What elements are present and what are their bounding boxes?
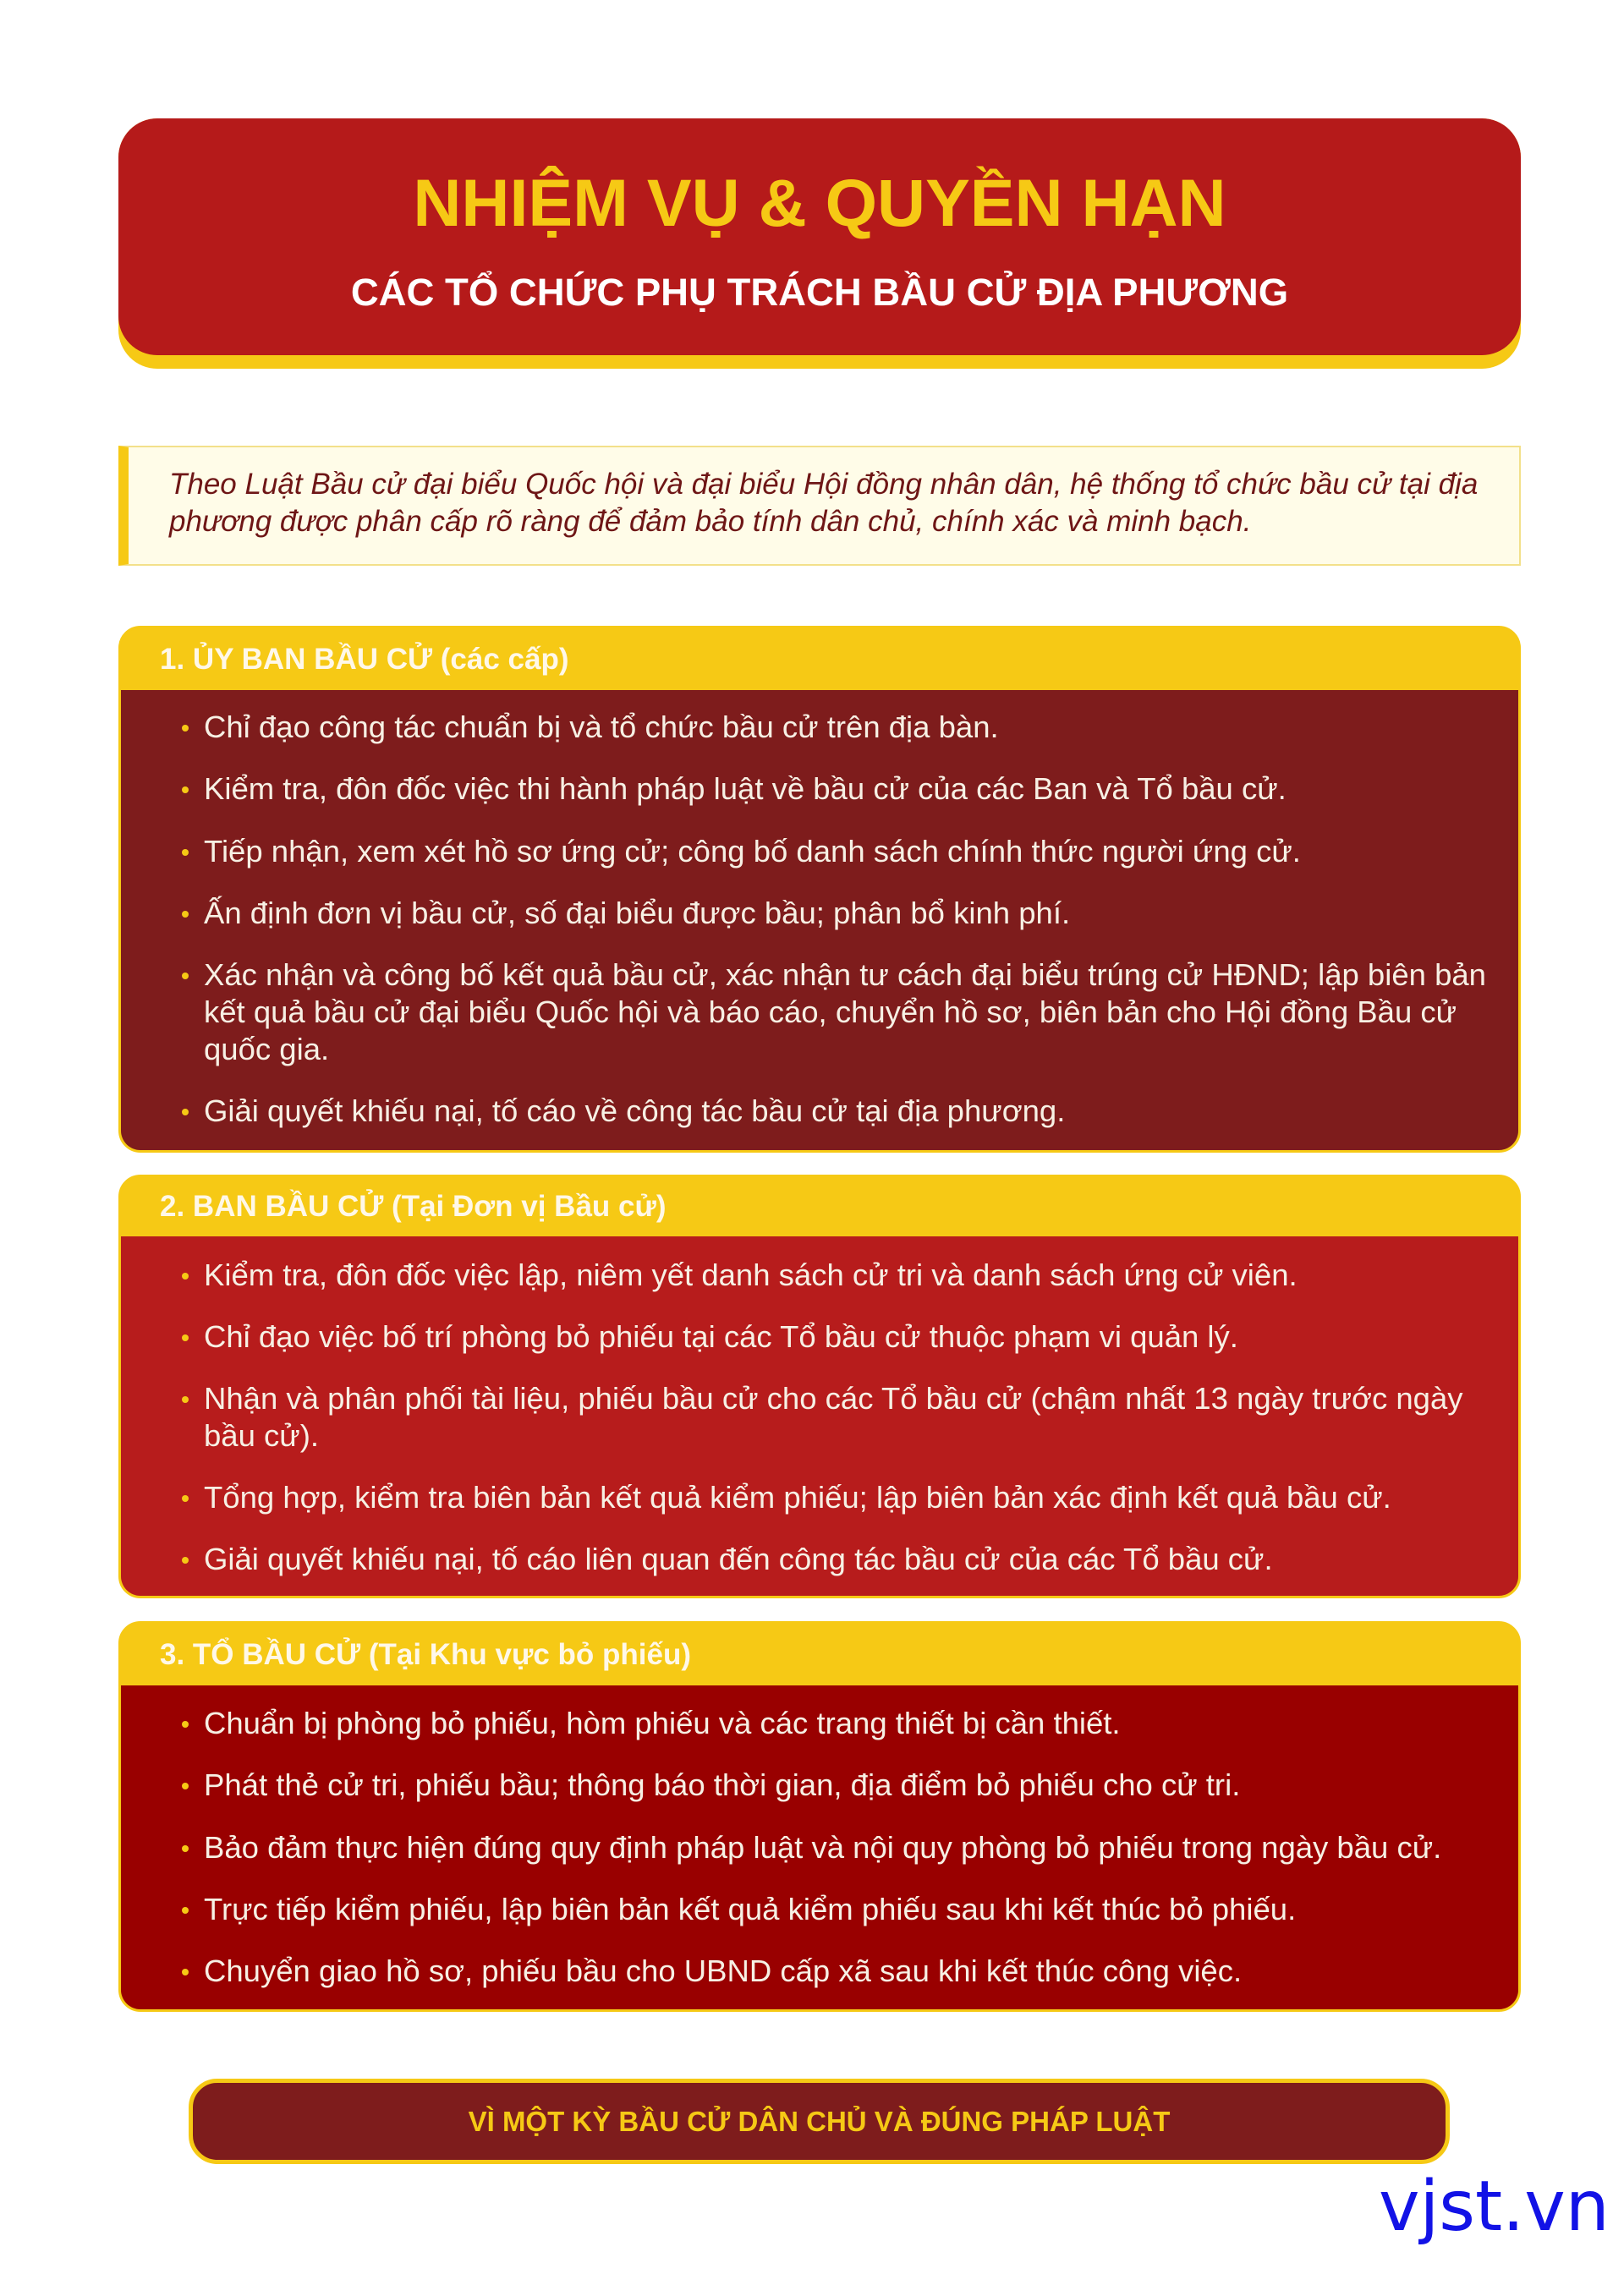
panel body 3: Chuyển giao hồ sơ, phiếu bầu cho UBND cấp xã sau khi kết thúc công việc.	[204, 1954, 1242, 1988]
panel body 2: bầu cử).	[204, 1418, 319, 1453]
panel body 1	[121, 690, 1518, 1150]
panel body 2: Tổng hợp, kiểm tra biên bản kết quả kiểm phiếu; lập biên bản xác định kết quả bầu cử.	[204, 1480, 1391, 1515]
panel heading 1: 1. ỦY BAN BẦU CỬ (các cấp)	[160, 643, 569, 676]
panel body 1: Tiếp nhận, xem xét hồ sơ ứng cử; công bố danh sách chính thức người ứng cử.	[204, 834, 1301, 869]
subtitle: CÁC TỔ CHỨC PHỤ TRÁCH BẦU CỬ ĐỊA PHƯƠNG	[351, 271, 1288, 314]
panel body 1: Giải quyết khiếu nại, tố cáo về công tác bầu cử tại địa phương.	[204, 1093, 1065, 1128]
panel body 1: Ấn định đơn vị bầu cử, số đại biểu được bầu; phân bổ kinh phí.	[204, 896, 1070, 930]
header banner	[118, 118, 1521, 369]
intro text block: Theo Luật Bầu cử đại biểu Quốc hội và đại biểu Hội đồng nhân dân, hệ thống tổ chức bầu cử tại địa	[169, 468, 1478, 501]
logo text: vjst.vn	[1379, 2167, 1610, 2247]
panel heading 2	[121, 1177, 1518, 1236]
panel heading 3: 3. TỔ BẦU CỬ (Tại Khu vực bỏ phiếu)	[160, 1638, 691, 1671]
footer slogan	[189, 2079, 1450, 2164]
panel body 1: Chỉ đạo công tác chuẩn bị và tổ chức bầu cử trên địa bàn.	[204, 710, 999, 744]
panel body 2	[121, 1236, 1518, 1596]
title: NHIỆM VỤ & QUYỀN HẠN	[413, 165, 1226, 240]
panel body 2: Chỉ đạo việc bố trí phòng bỏ phiếu tại các Tổ bầu cử thuộc phạm vi quản lý.	[204, 1319, 1238, 1354]
panel body 1: Kiểm tra, đôn đốc việc thi hành pháp luật về bầu cử của các Ban và Tổ bầu cử.	[204, 771, 1287, 806]
panel: Ban bau cu	[118, 1175, 1521, 1598]
panel heading 3	[121, 1624, 1518, 1685]
panel body 3: Phát thẻ cử tri, phiếu bầu; thông báo thời gian, địa điểm bỏ phiếu cho cử tri.	[204, 1767, 1240, 1802]
panel body 1: Xác nhận và công bố kết quả bầu cử, xác nhận tư cách đại biểu trúng cử HĐND; lập biên bản	[204, 957, 1486, 992]
panel body 1: quốc gia.	[204, 1032, 329, 1066]
intro text block	[118, 446, 1521, 566]
panel body 2: Giải quyết khiếu nại, tố cáo liên quan đến công tác bầu cử của các Tổ bầu cử.	[204, 1542, 1273, 1576]
panel: Uy ban bau cu	[118, 626, 1521, 1153]
panel heading 1	[121, 628, 1518, 690]
panel body 3	[121, 1685, 1518, 2009]
panel body 1: kết quả bầu cử đại biểu Quốc hội và báo cáo, chuyển hồ sơ, biên bản cho Hội đồng Bầu cử	[204, 995, 1457, 1029]
panel body 3: Bảo đảm thực hiện đúng quy định pháp luật và nội quy phòng bỏ phiếu trong ngày bầu cử.	[204, 1830, 1441, 1865]
footer slogan: VÌ MỘT KỲ BẦU CỬ DÂN CHỦ VÀ ĐÚNG PHÁP LUẬT	[469, 2106, 1170, 2137]
panel body 2: Nhận và phân phối tài liệu, phiếu bầu cử cho các Tổ bầu cử (chậm nhất 13 ngày trước ngày	[204, 1381, 1463, 1416]
panel heading 2: 2. BAN BẦU CỬ (Tại Đơn vị Bầu cử)	[160, 1190, 667, 1223]
panel body 3: Chuẩn bị phòng bỏ phiếu, hòm phiếu và các trang thiết bị cần thiết.	[204, 1706, 1121, 1740]
panel: To bau cu	[118, 1621, 1521, 2012]
panel body 3: Trực tiếp kiểm phiếu, lập biên bản kết quả kiểm phiếu sau khi kết thúc bỏ phiếu.	[204, 1892, 1296, 1926]
intro text block: phương được phân cấp rõ ràng để đảm bảo tính dân chủ, chính xác và minh bạch.	[169, 505, 1251, 538]
panel body 2: Kiểm tra, đôn đốc việc lập, niêm yết danh sách cử tri và danh sách ứng cử viên.	[204, 1258, 1298, 1292]
